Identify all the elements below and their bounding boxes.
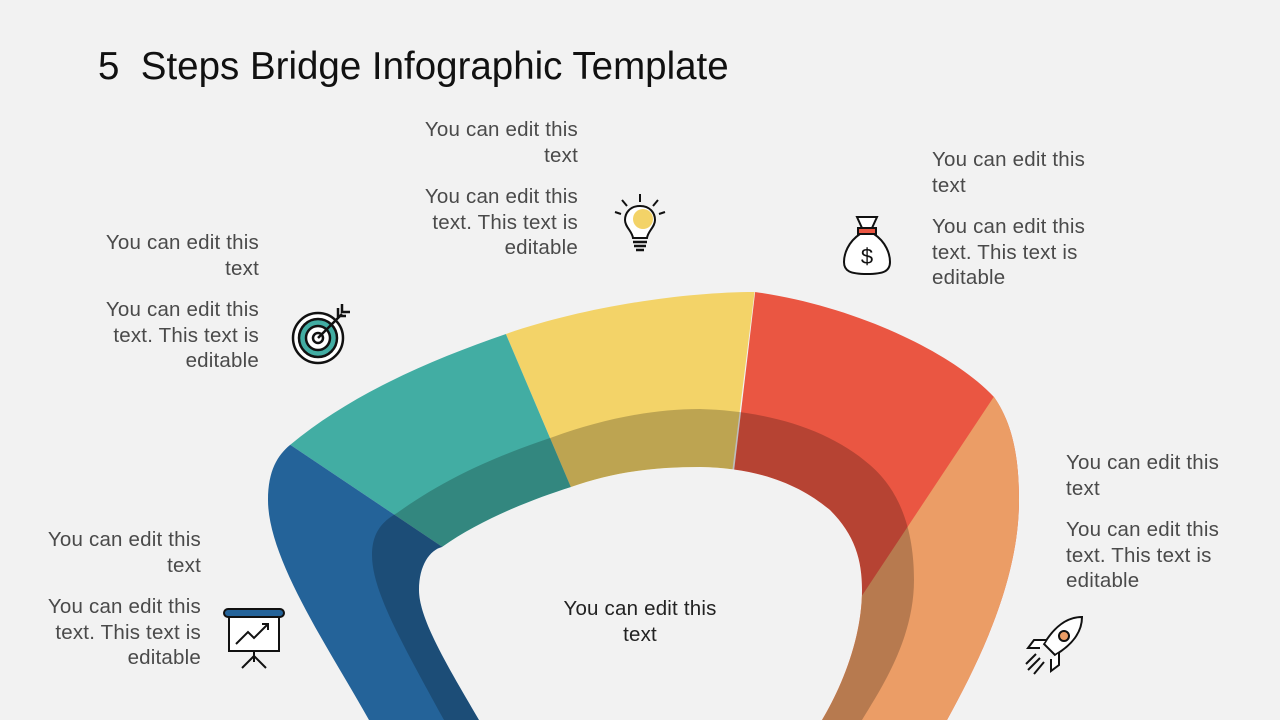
text: left upper: editable	[186, 349, 259, 372]
text: left lower: You can edit this	[48, 528, 201, 551]
icon: light bulb	[614, 194, 666, 252]
text: center	[563, 597, 717, 646]
text: right upper: text. This text is	[932, 240, 1078, 264]
text: top center	[425, 118, 578, 259]
segment: red	[734, 292, 1019, 720]
icon: money bag	[843, 216, 891, 275]
text: right lower: You can edit this	[1066, 518, 1219, 541]
text: left lower: text. This text is	[55, 620, 201, 644]
text: left upper	[106, 231, 259, 372]
text: left lower: editable	[128, 646, 201, 669]
text: left upper: text	[225, 256, 259, 280]
icon: rocket	[1025, 616, 1083, 675]
text: left upper: You can edit this	[106, 298, 259, 321]
segment: orange	[822, 396, 1019, 720]
text: right upper: editable	[932, 266, 1005, 289]
text: right upper: text	[932, 174, 966, 196]
segment: blue	[268, 444, 479, 720]
icon: money bag: $	[861, 244, 873, 269]
text: top center: text	[544, 144, 578, 166]
text: right lower	[1066, 451, 1219, 592]
segment: yellow	[506, 292, 755, 487]
text: top center: text. This text is	[432, 210, 578, 234]
text: right lower: text. This text is	[1066, 544, 1212, 566]
text: right lower: editable	[1066, 569, 1139, 592]
text: left lower: You can edit this	[48, 595, 201, 618]
segment: teal	[290, 334, 571, 547]
text: top center: You can edit this	[425, 185, 578, 208]
icon: target	[292, 304, 350, 364]
text: right lower: You can edit this	[1066, 451, 1219, 474]
text: right upper: You can edit this	[932, 148, 1085, 171]
text: center: You can edit this	[563, 597, 717, 620]
text: left lower: text	[167, 554, 201, 576]
text: top center: editable	[505, 236, 578, 259]
text: right upper: You can edit this	[932, 215, 1085, 238]
inner shadow band	[372, 409, 914, 720]
text: right lower: text	[1066, 476, 1100, 500]
text: left lower	[48, 528, 201, 669]
title: 5 Steps Bridge Infographic Template	[98, 45, 729, 88]
text: left upper: text. This text is	[113, 324, 259, 346]
text: center: text	[623, 622, 657, 646]
text: left upper: You can edit this	[106, 231, 259, 254]
text: top center: You can edit this	[425, 118, 578, 141]
text: right upper	[932, 148, 1085, 289]
bridge chart	[268, 292, 1019, 720]
icon: presentation board	[223, 608, 285, 669]
